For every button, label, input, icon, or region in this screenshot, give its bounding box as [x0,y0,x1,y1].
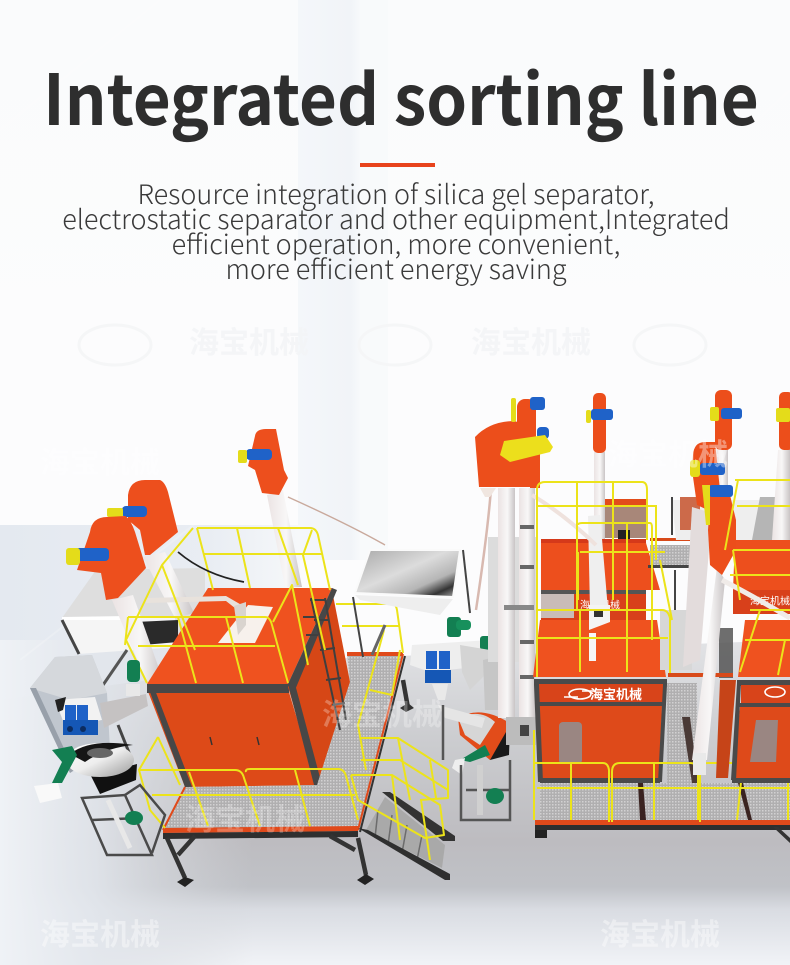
back hopper [605,499,647,542]
rear middle grating and stairs [648,538,692,670]
machine: left silica gel separator group [30,429,470,887]
walkway supports and edge [535,683,790,843]
elevator: rear tall lifter [238,429,302,587]
motors: left feeder blue drives [55,697,102,735]
stand: left frame with blower [82,785,165,855]
tall columns [498,488,536,745]
watermarks: 海宝机械 text and logos: 海宝机械 [40,438,160,482]
sorter cabinet: top face [147,588,332,684]
description text [62,173,730,287]
sorter station: right [668,390,790,783]
machine: centre destoner group [410,617,510,820]
separator: centre round winnower [438,705,510,775]
description text: efficient operation, more convenient, [172,223,620,262]
opening: white chute on cabinet top [146,596,273,643]
title: Integrated sorting line [43,45,759,146]
thin chute from head to floor [476,488,491,610]
description text: Resource integration of silica gel separator, [138,173,654,212]
platform legs [167,680,414,887]
description text: more efficient energy saving [225,248,567,287]
logo band text [564,684,642,703]
sorter cabinet: side face [288,588,350,785]
tube: vertical steel pipe [483,655,503,710]
railings: right station [725,480,790,675]
watermarks: 海宝机械 text and logos: 海宝机械 [608,430,728,474]
separator: left round winnower [34,743,137,803]
watermarks: 海宝机械 text and logos: 海宝机械 [189,318,309,362]
hopper: right steel tray [353,550,470,657]
watermarks: 海宝机械 text and logos: 海宝机械 [471,318,591,362]
walkway grating front [540,783,790,820]
elevator: far rear lifter [710,390,742,498]
elevator: middle lifter [107,480,194,618]
elevator: right pair columns [683,507,725,775]
conveyor: centre blue motor feeder [410,617,500,700]
elevator head [475,397,549,488]
rear tray right [672,500,790,540]
elevator: edge lifter [772,392,790,540]
watermarks: 海宝机械 text and logos: 海宝机械 [185,795,305,839]
diagonal white tube [722,580,790,618]
watermarks: 海宝机械 text and logos: 海宝机械 [600,910,720,954]
stairs [358,792,455,880]
wire: thin diagonal tube [288,497,385,545]
machine: tall bucket elevator with yellow belt [475,397,553,745]
elevator: front lifter [66,516,163,685]
railings: cabinet top and walkway [125,528,448,860]
sorter station: middle [532,482,790,843]
rear cabinet [541,539,660,620]
stand: centre frame with blower [461,760,510,820]
railings: middle station [534,482,790,822]
platform: walkway grating [163,652,405,839]
hopper: left back steel tray [62,568,205,685]
front cabinet top [533,620,666,677]
logo band text: 海宝机械 [590,684,642,703]
centre white bucket unit [532,495,610,661]
watermarks: 海宝机械 text and logos [40,318,728,954]
right rear cabinet [733,540,790,614]
ladder on cabinet side [303,598,346,730]
front cabinet body [534,679,667,783]
conveyor: left vibrating chute [100,660,148,755]
cable: black hose [178,552,244,582]
rear cabinet: 海宝机械 [580,597,620,612]
right front cabinet [731,620,790,783]
side face and ladder [668,628,736,778]
right rear cabinet: 海宝机械 [750,593,790,608]
yellow belt cover [500,435,553,462]
sorter cabinet: front face [147,684,317,787]
steel box: left feeder [30,655,110,773]
accent rule [360,163,435,167]
watermarks: 海宝机械 text and logos: 海宝机械 [40,910,160,954]
watermarks: 海宝机械 text and logos: 海宝机械 [322,690,442,734]
elevator: right pair heads [690,442,736,575]
back column panel [488,537,536,662]
elevator: rear centre lifter [586,393,613,547]
description text: electrostatic separator and other equipment,Integrated [62,198,730,237]
